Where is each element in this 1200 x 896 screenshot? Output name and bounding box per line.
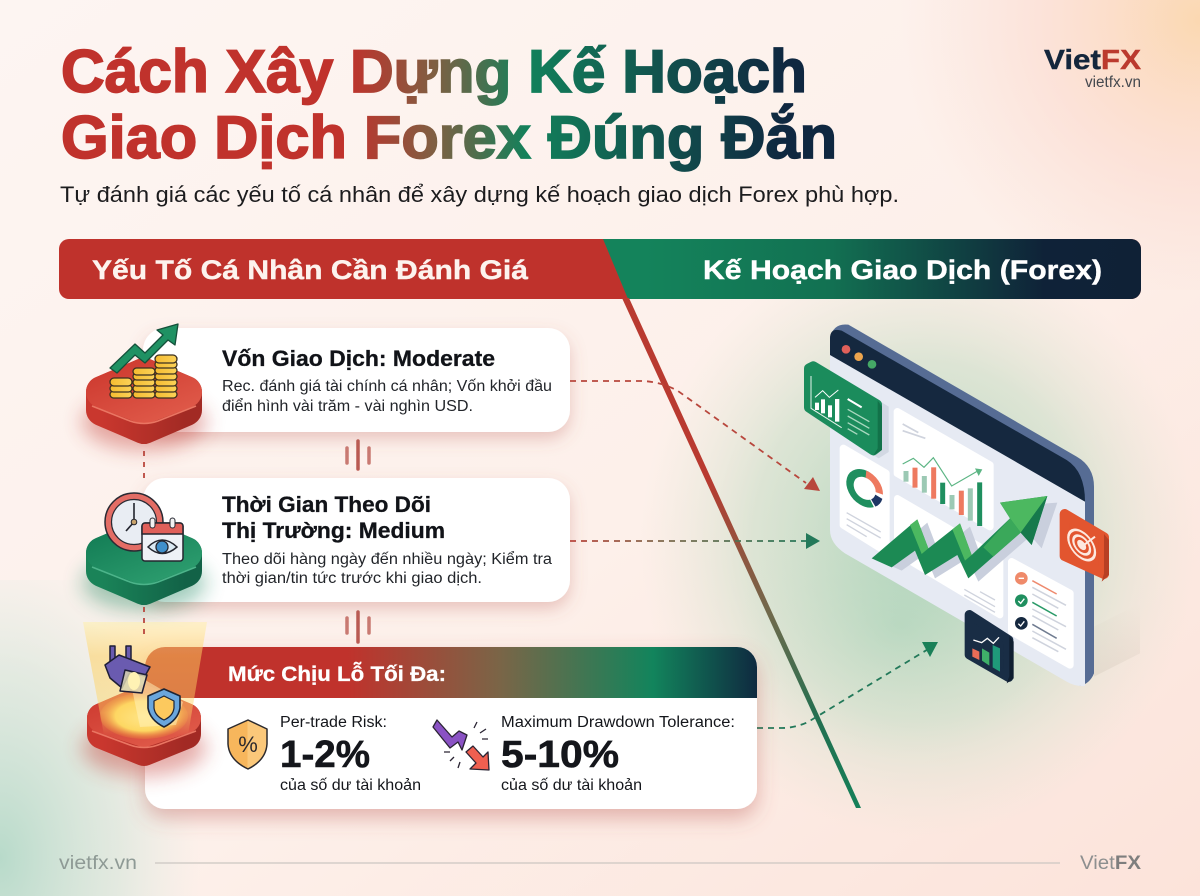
connector arrow: risk to dashboard [757,642,938,728]
body: time [222,551,552,587]
separator ticks [347,441,369,642]
connector arrow: capital to dashboard [570,381,820,491]
icon: blue shield [148,689,180,727]
connector arrow: time to dashboard [570,533,820,549]
body: capital [222,378,552,415]
panel: time card [143,478,570,602]
icon: coins and rising arrow [110,324,178,398]
footer url: vietfx.vn [59,853,137,874]
widget: donut card [843,448,886,552]
logo: VietFX: vietfx.vn [1085,74,1141,91]
logo: VietFX [1044,44,1141,91]
subtitle: Tự đánh giá các yếu tố cá nhân để xây dựng kế hoạch giao dịch Forex phù hợp. [60,182,899,207]
widget: lower center card [897,498,1000,615]
title [61,38,837,171]
card header band [145,647,757,698]
right header label: Kế Hoạch Giao Dịch (Forex) [703,255,1102,285]
pedestal: spotlight risk [82,693,206,776]
dashed links between pedestals [143,451,145,640]
per-trade risk stat: của số dư tài khoản [280,777,421,794]
panel: maximum loss tolerance card [145,647,757,809]
body: time: thời gian/tin tức trước khi giao dịch. [222,570,482,587]
title: Cách Xây Dựng Kế Hoạch [61,38,807,105]
title: Giao Dịch Forex Đúng Đắn [61,104,837,171]
body: time: Theo dõi hàng ngày đến nhiều ngày; Kiểm tra [222,551,552,568]
pedestal: red capital [82,374,206,450]
body: capital: điển hình vài trăm - vài nghìn USD. [222,398,473,415]
floating card: dark mini chart [969,615,1014,683]
icon: percent shield: % [238,732,258,757]
left header label: Yếu Tố Cá Nhân Cần Đánh Giá [92,255,529,285]
header banner [59,239,1141,299]
max drawdown stat: của số dư tài khoản [501,777,642,794]
pedestal: green time [82,535,206,611]
heading: time: Thời Gian Theo Dõi [222,492,431,517]
heading: time: Thị Trường: Medium [222,518,445,543]
spotlight cone [83,622,207,735]
logo: VietFX: VietFX [1044,44,1141,75]
window face [830,353,1085,686]
icon: clock and eye calendar [105,493,183,561]
window side edge [830,324,1094,686]
big rising arrow [872,496,1057,582]
max drawdown stat: 5-10% [501,734,619,776]
widget: checklist card [1012,562,1070,665]
heading: capital: Vốn Giao Dịch: Moderate [222,346,495,371]
diagonal divider line [622,298,861,808]
card heading: Mức Chịu Lỗ Tối Đa: [228,662,446,686]
icon: percent shield [228,720,267,769]
floating card: green chart [808,363,889,458]
per-trade risk stat: Per-trade Risk: [280,714,387,731]
footer brand: VietFX [1080,853,1141,874]
per-trade risk stat: 1-2% [280,734,370,776]
body: capital: Rec. đánh giá tài chính cá nhân; Vốn khởi đầu [222,378,552,395]
panel: capital card [143,328,570,432]
heading: time [222,492,445,543]
window title bar [830,330,1085,502]
max drawdown stat [501,714,735,794]
icon: spotlight lamp [105,646,150,693]
floating card: target [1065,514,1109,582]
lamp beam [128,670,183,727]
footer [59,853,1141,874]
cast shadow [1094,603,1140,677]
widget: bar line chart card [897,412,990,527]
max drawdown stat: Maximum Drawdown Tolerance: [501,714,735,731]
per-trade risk stat [280,714,421,794]
illustration: isometric trading dashboard [808,324,1140,686]
icon: broken drawdown arrow [433,720,489,770]
